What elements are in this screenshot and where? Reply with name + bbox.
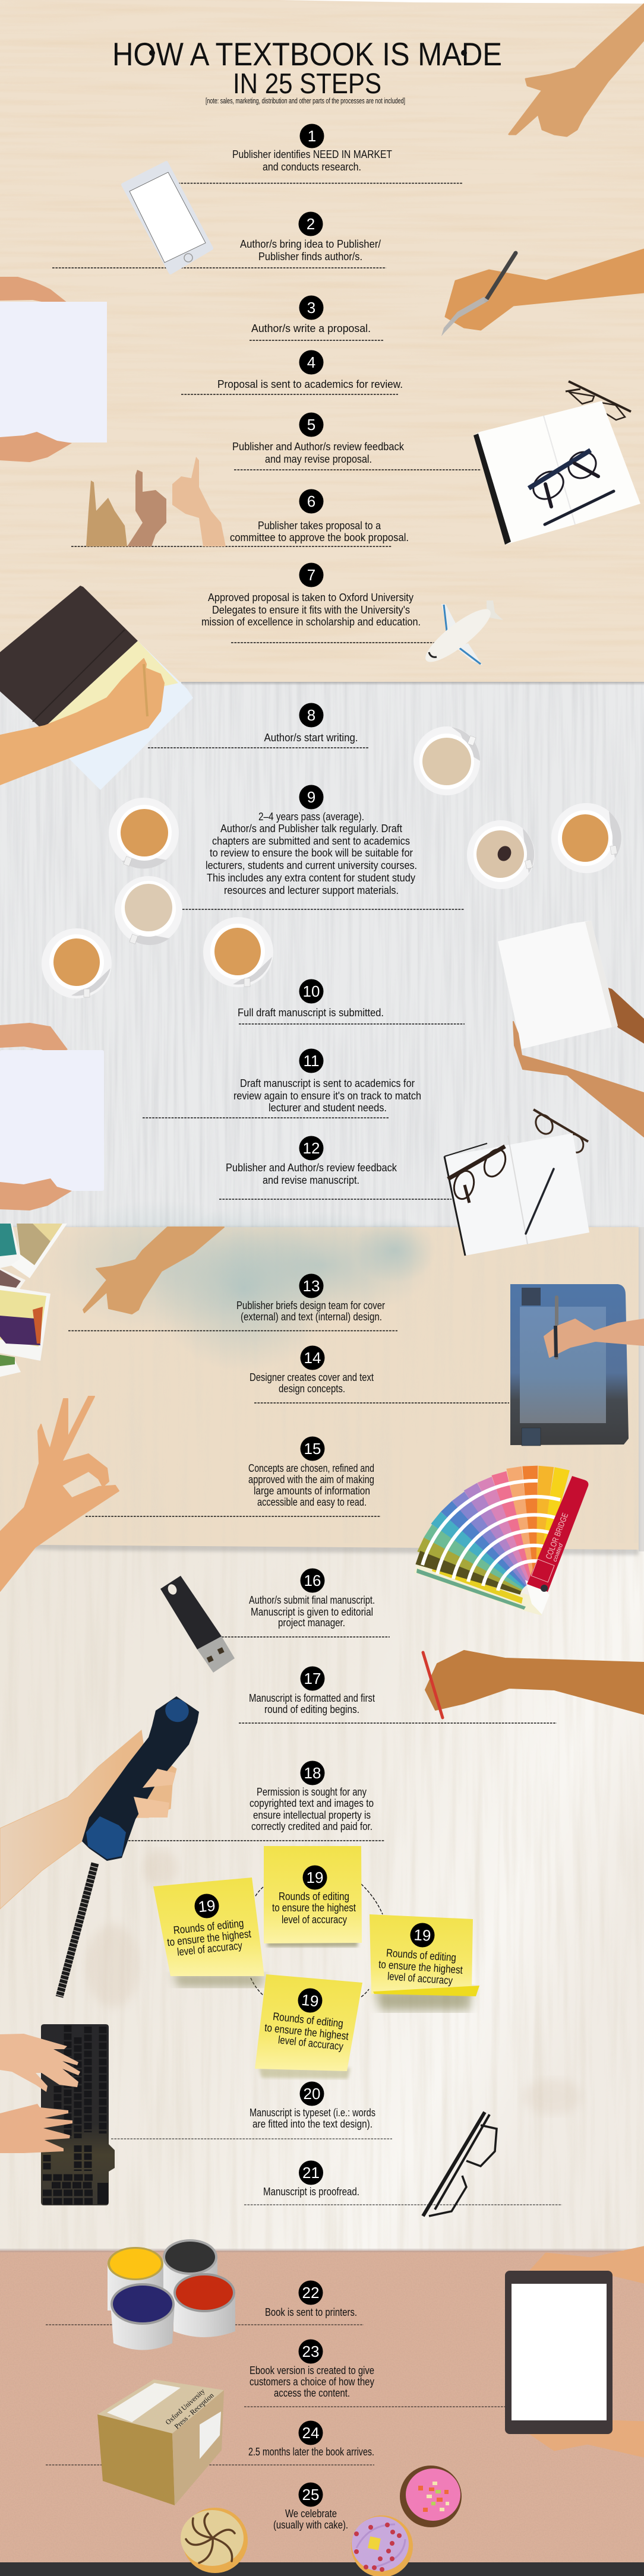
- step 18: [128, 1760, 384, 1841]
- sticky note: right: [370, 1914, 479, 2011]
- step 10: 10: [303, 982, 320, 1000]
- step 7: [201, 563, 435, 643]
- step 15: approved with the aim of making: [248, 1473, 374, 1485]
- step 17: 17: [304, 1670, 321, 1687]
- icon: folder, paper and writing hand: [0, 586, 193, 790]
- sticky note: right: level of accuracy: [387, 1970, 453, 1987]
- icon: shipping box: Press - Reception: [173, 2391, 215, 2430]
- sticky note: top: Rounds of editing: [279, 1890, 349, 1902]
- step 11: 11: [303, 1052, 320, 1070]
- step 7: Approved proposal is taken to Oxford University: [208, 591, 414, 603]
- step 13: [68, 1273, 397, 1330]
- step 18: correctly credited and paid for.: [251, 1820, 372, 1832]
- icon: open notebook with glasses and pen: [473, 401, 640, 545]
- step 2: Publisher finds author/s.: [258, 250, 362, 263]
- blue ink can: [111, 2283, 175, 2350]
- sticky note: left: level of accuracy: [176, 1939, 243, 1958]
- icon: graphics tablet with hand and stylus: [510, 1284, 644, 1446]
- step 14: [250, 1346, 509, 1403]
- icon: tablet held by two hands: [505, 2247, 644, 2457]
- step 2: 2: [307, 215, 315, 233]
- step 7: mission of excellence in scholarship and education.: [201, 615, 421, 628]
- step 1: Publisher identifies NEED IN MARKET: [232, 148, 392, 160]
- icon: colour swatch fan: [414, 1466, 588, 1616]
- step 18: Permission is sought for any: [257, 1785, 367, 1798]
- step 16: 16: [304, 1572, 321, 1589]
- step 14: design concepts.: [279, 1382, 345, 1395]
- sticky note: left: [153, 1878, 264, 1987]
- step 22: Book is sent to printers.: [265, 2306, 357, 2318]
- sticky note: left: 19: [197, 1897, 216, 1916]
- sticky note: right: Rounds of editing: [386, 1946, 457, 1964]
- step 11: review again to ensure it's on track to match: [233, 1089, 421, 1102]
- step 4: [181, 350, 403, 394]
- step 10: Full draft manuscript is submitted.: [238, 1006, 384, 1019]
- icon: OK hand gesture: [0, 1396, 119, 1591]
- icon: keyboard with typing hands: [0, 2024, 115, 2205]
- icon: coffee cup 7: [551, 803, 621, 873]
- background: tan wood panel with teal wash, steps 13 to 15: [0, 1200, 644, 1555]
- step 12: 12: [303, 1139, 320, 1157]
- title: [112, 36, 502, 100]
- step 25: 25: [302, 2486, 319, 2504]
- step 5: and may revise proposal.: [265, 453, 372, 465]
- sticky note: top: 19: [307, 1869, 323, 1886]
- step 14: 14: [304, 1349, 321, 1367]
- icon: coffee cup 1: [413, 726, 480, 795]
- icon: pointing hand, top right: [509, 4, 644, 136]
- step 14: Designer creates cover and text: [250, 1371, 374, 1383]
- step 1: 1: [308, 127, 316, 145]
- red ink can: [173, 2273, 235, 2337]
- step 5: [232, 412, 481, 470]
- icon: hands holding white book: [498, 921, 644, 1137]
- red cover of swatch fan: [527, 1476, 588, 1592]
- step 21: 21: [302, 2164, 320, 2182]
- icon: coffee cup 5: [203, 917, 273, 987]
- step 9: 9: [307, 788, 315, 806]
- step 3: 3: [307, 299, 315, 317]
- icon: hand writing with pen: [441, 249, 644, 336]
- step 15: [86, 1436, 381, 1516]
- step 20: are fitted into the text design).: [252, 2117, 372, 2130]
- background: off-white wood panel, steps 16 to 21: [0, 1543, 644, 2251]
- icon: printing ink cans: [108, 2239, 235, 2350]
- icon: shipping box: Oxford University: [164, 2387, 206, 2426]
- step 9: lecturers, students and current university courses.: [206, 859, 417, 871]
- icon: purple cupcake: [351, 2515, 413, 2576]
- icon: coffee cup 2: [109, 798, 179, 868]
- step 6: [71, 489, 409, 546]
- icon: hands holding blank page, top left: [0, 277, 107, 462]
- black ink can: [163, 2239, 217, 2305]
- step 10: [238, 979, 465, 1024]
- step 24: 2.5 months later the book arrives.: [248, 2445, 374, 2458]
- step 21: Manuscript is proofread.: [263, 2185, 359, 2198]
- step 9: to review to ensure the book will be suitable for: [210, 846, 413, 859]
- step 23: 23: [302, 2343, 319, 2360]
- icon: open notebook with glasses and pen, middle right: [444, 1133, 589, 1256]
- step 22: [46, 2281, 364, 2325]
- sticky note: right: to ensure the highest: [378, 1958, 463, 1976]
- footer bar: [0, 2562, 644, 2576]
- icon: coffee cup 3: [115, 876, 182, 945]
- step 5: 5: [307, 416, 315, 434]
- dashed cycle arcs: [251, 1884, 383, 1997]
- glasses on notebook: [448, 1146, 510, 1203]
- step 11: Draft manuscript is sent to academics for: [240, 1077, 415, 1089]
- step 17: Manuscript is formatted and first: [249, 1692, 375, 1704]
- sticky note: left: Rounds of editing: [173, 1917, 244, 1936]
- step 23: access the content.: [274, 2387, 350, 2399]
- step 18: 18: [304, 1764, 321, 1782]
- step 9: This includes any extra content for student study: [207, 871, 416, 884]
- step 11: [143, 1049, 421, 1118]
- step 5: Publisher and Author/s review feedback: [232, 440, 405, 453]
- step 13: Publisher briefs design team for cover: [236, 1299, 385, 1311]
- step 15: accessible and easy to read.: [257, 1496, 367, 1508]
- sticky note: bottom: 19: [301, 1991, 320, 2010]
- step 19: cycle of sticky notes: [153, 1846, 479, 2079]
- step 16: Author/s submit final manuscript.: [249, 1594, 375, 1606]
- icon: glasses, middle right: [532, 1110, 588, 1155]
- step 3: [250, 296, 383, 340]
- sticky note: top: [264, 1846, 362, 1947]
- sticky note: bottom: Rounds of editing: [272, 2010, 344, 2030]
- step 24: 24: [302, 2424, 319, 2442]
- step 4: Proposal is sent to academics for review.: [217, 378, 403, 390]
- icon: coffee cup 6: [467, 820, 535, 889]
- glasses on notebook: [528, 447, 601, 507]
- step 16: [222, 1568, 390, 1637]
- step 2: Author/s bring idea to Publisher/: [240, 238, 381, 250]
- step 18: ensure intellectual property is: [253, 1809, 371, 1821]
- step 23: [244, 2339, 505, 2407]
- title: IN 25 STEPS: [233, 68, 381, 100]
- step 17: round of editing begins.: [264, 1703, 359, 1715]
- step 23: Ebook version is created to give: [250, 2364, 374, 2376]
- step 24: [46, 2421, 374, 2465]
- icon: toy airplane: [419, 600, 503, 669]
- step 25: [273, 2483, 348, 2531]
- icon: scattered photographs: [0, 1224, 67, 1377]
- sticky note: bottom: level of accuracy: [277, 2033, 344, 2053]
- step 8: 8: [307, 706, 315, 724]
- step 12: Publisher and Author/s review feedback: [226, 1161, 397, 1174]
- icon: pink cupcake: [400, 2466, 462, 2527]
- step 6: committee to approve the book proposal.: [230, 531, 409, 543]
- icon: USB drive: [160, 1576, 235, 1673]
- step 17: [239, 1667, 557, 1723]
- red cover of swatch fan: COLOR BRIDGE: [544, 1512, 570, 1560]
- step 25: (usually with cake).: [273, 2518, 348, 2531]
- background: grey wood panel, steps 8 to 12: [0, 682, 644, 1228]
- step 23: customers a choice of how they: [250, 2375, 375, 2388]
- yellow ink can: [108, 2247, 163, 2311]
- red cover of swatch fan: coated: [552, 1543, 564, 1563]
- typing hands: [0, 2034, 80, 2092]
- step 13: 13: [303, 1277, 320, 1295]
- icon: pointing hand over design brief: [83, 1227, 224, 1314]
- step 25: We celebrate: [285, 2507, 337, 2520]
- icon: glasses, lower right: [423, 2112, 497, 2216]
- step 12: and revise manuscript.: [263, 1174, 359, 1186]
- sticky note: left: to ensure the highest: [166, 1927, 252, 1948]
- step 8: Author/s start writing.: [264, 731, 358, 744]
- step 1: and conducts research.: [263, 160, 361, 173]
- sticky note: top: to ensure the highest: [272, 1901, 356, 1914]
- telephone cord: [59, 1863, 95, 1997]
- icon: hands holding blank page, middle left: [0, 1023, 104, 1210]
- icon: three thumbs up: [86, 457, 226, 546]
- step 6: 6: [307, 492, 315, 510]
- step 9: resources and lecturer support materials.: [224, 884, 399, 896]
- background: light wood panel, steps 1 to 7: [0, 0, 644, 683]
- icon: hand holding red pencil: [423, 1651, 644, 1718]
- step 20: Manuscript is typeset (i.e.: words: [250, 2106, 375, 2119]
- icon: smartphone: [123, 163, 211, 273]
- subtitle note: [note: sales, marketing, distribution and other parts of the processes are not included]: [206, 96, 405, 105]
- step 21: [244, 2161, 562, 2205]
- step 15: Concepts are chosen, refined and: [248, 1462, 374, 1474]
- step 4: 4: [307, 353, 315, 371]
- step 22: 22: [302, 2284, 319, 2302]
- step 16: Manuscript is given to editorial: [251, 1605, 373, 1618]
- step 8: [148, 703, 369, 748]
- sticky note: top: level of accuracy: [282, 1913, 348, 1926]
- step 9: Author/s and Publisher talk regularly. Draft: [220, 822, 402, 835]
- step 6: Publisher takes proposal to a: [258, 519, 381, 532]
- title: HOW A TEXTBOOK IS MADE: [112, 36, 502, 72]
- step 13: (external) and text (internal) design.: [241, 1310, 382, 1323]
- pen on notebook: [526, 1169, 554, 1234]
- icon: glasses, top right: [566, 381, 631, 420]
- sticky note: bottom: to ensure the highest: [264, 2021, 349, 2042]
- step 3: Author/s write a proposal.: [251, 322, 371, 334]
- icon: hand holding telephone receiver: [0, 1695, 199, 1997]
- step 7: Delegates to ensure it fits with the University's: [212, 603, 410, 616]
- icon: shipping box: [97, 2379, 224, 2505]
- step 20: 20: [304, 2085, 320, 2103]
- step 18: copyrighted text and images to: [250, 1797, 374, 1809]
- background: kraft paper panel, steps 22 to 25: [0, 2249, 644, 2563]
- step 12: [219, 1136, 452, 1199]
- step 16: project manager.: [278, 1616, 345, 1629]
- step 15: 15: [304, 1440, 321, 1458]
- step 7: 7: [307, 566, 315, 584]
- step 1: [178, 124, 463, 183]
- step 20: [111, 2081, 392, 2139]
- sticky note: bottom: [255, 1974, 362, 2079]
- step 9: chapters are submitted and sent to academics: [212, 835, 410, 847]
- pen on notebook: [545, 491, 614, 524]
- step 15: large amounts of information: [254, 1484, 370, 1497]
- step 9: [182, 785, 465, 909]
- icon: cream cupcake: [181, 2508, 248, 2573]
- step 2: [52, 211, 386, 268]
- step 11: lecturer and student needs.: [269, 1101, 387, 1114]
- icon: coffee cup 4: [42, 928, 112, 998]
- sticky note: right: 19: [413, 1926, 431, 1945]
- step 9: 2–4 years pass (average).: [258, 810, 364, 823]
